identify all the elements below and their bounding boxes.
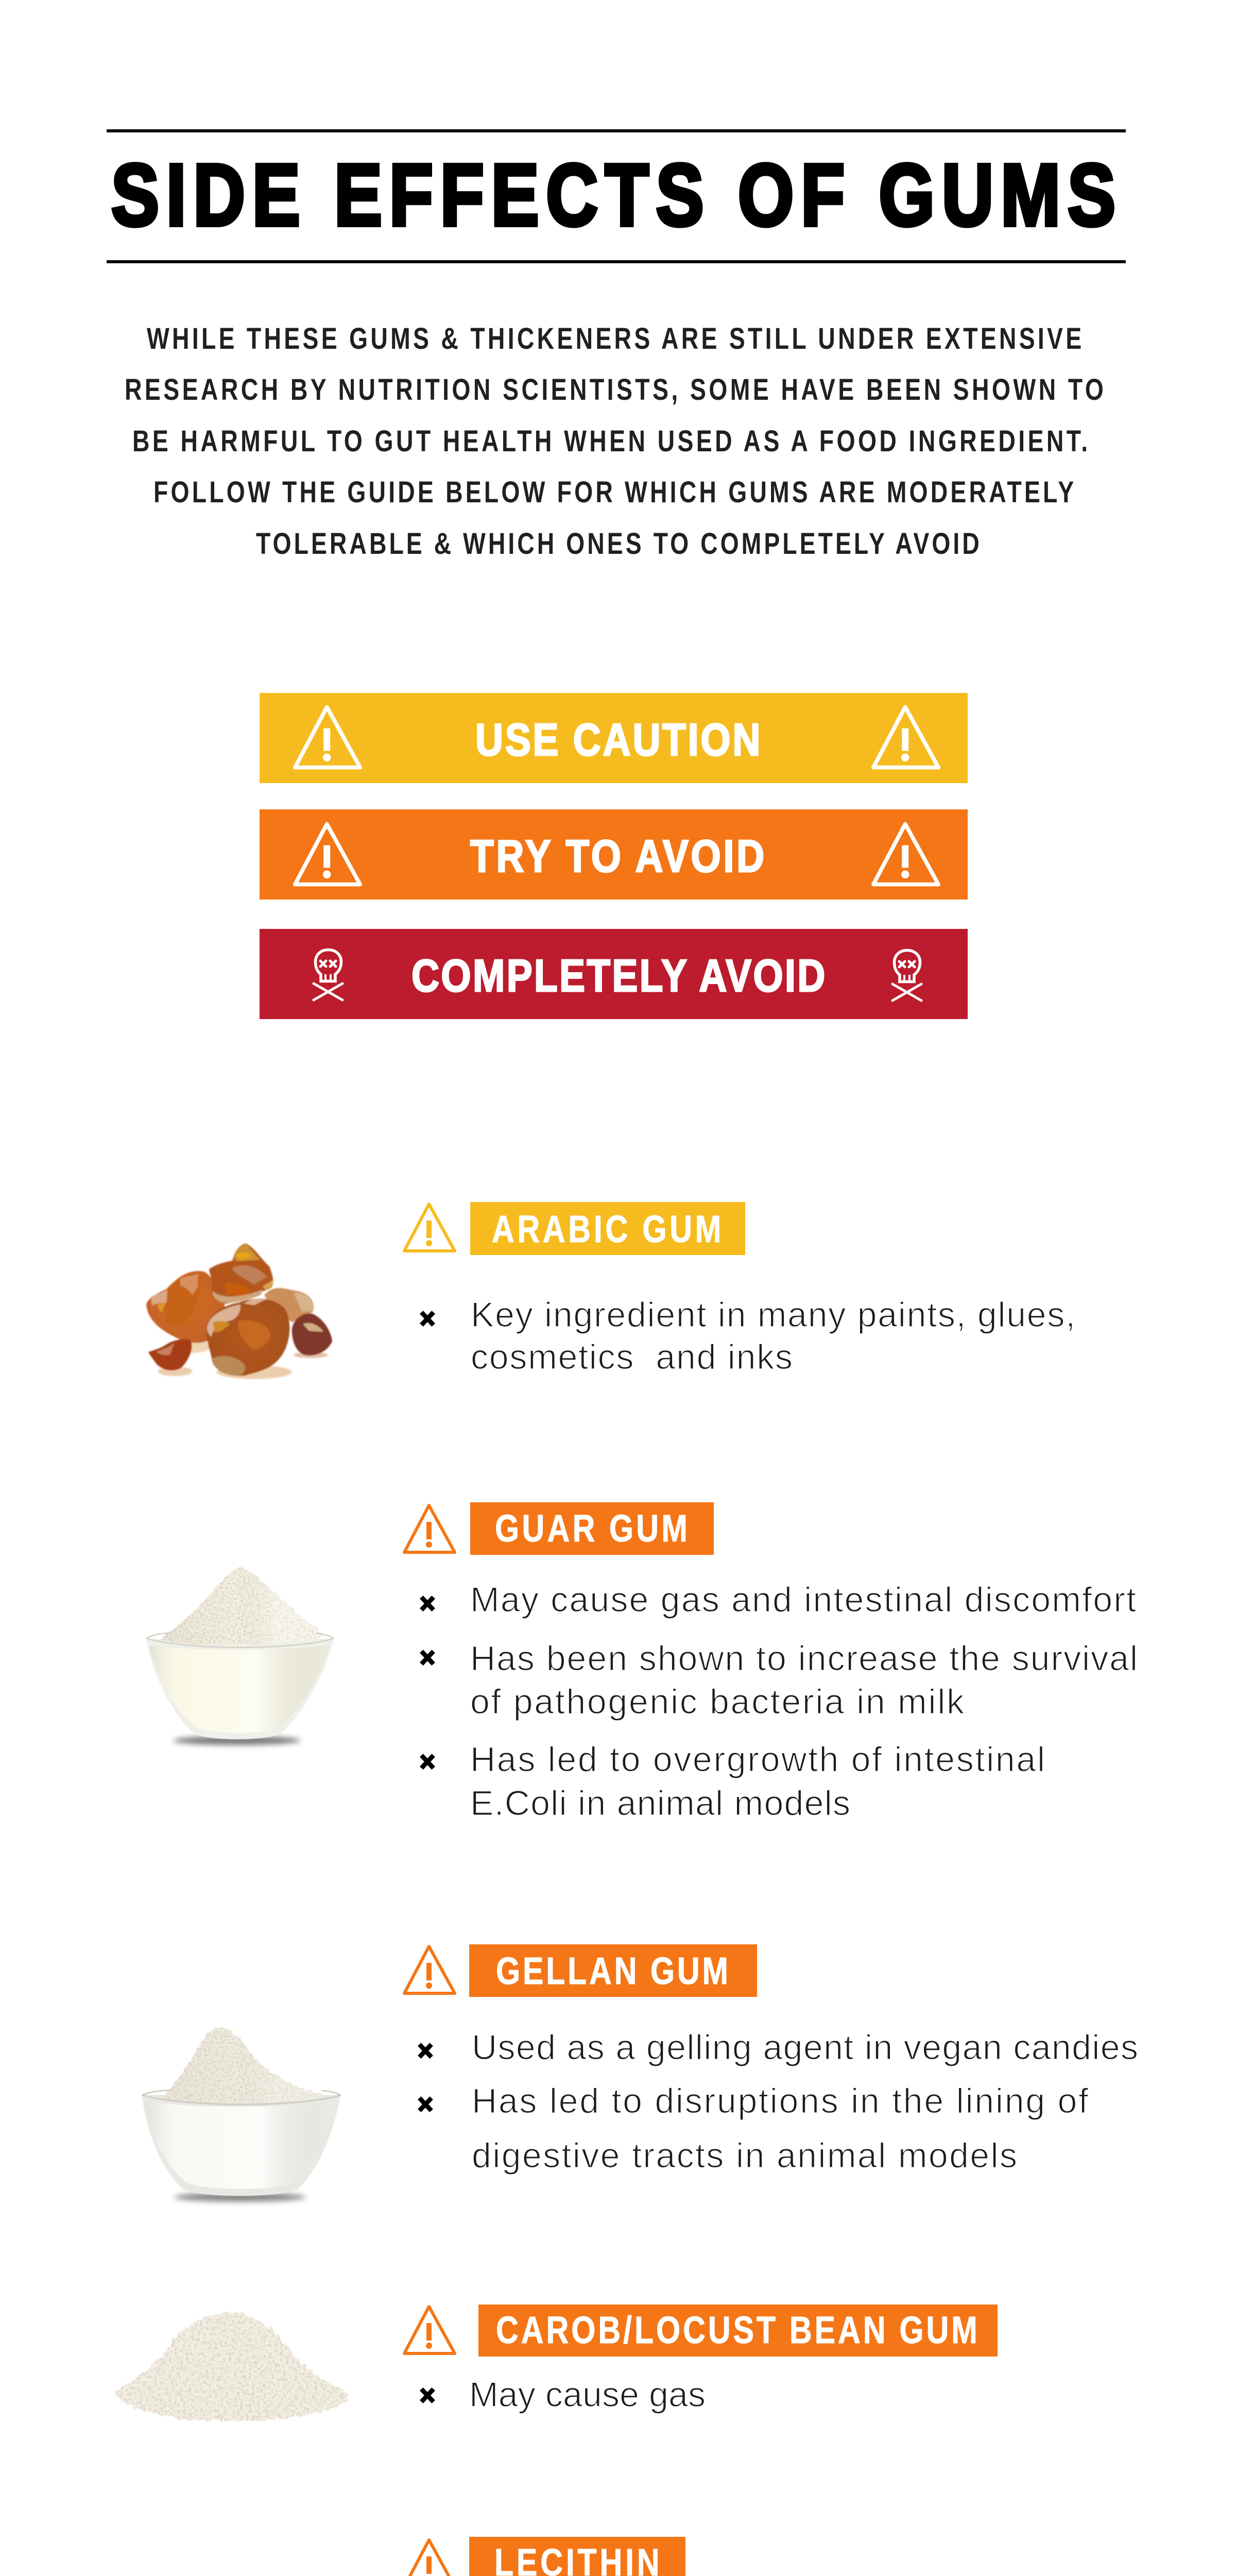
legend bar: try to avoid [260, 809, 968, 900]
label: guar gum: GUAR GUM [495, 1507, 688, 1550]
bullet: paints, glues: Key ingredient in many paints, glues, [471, 1295, 1075, 1334]
intro paragraph: RESEARCH BY NUTRITION SCIENTISTS, SOME HAVE BEEN SHOWN TO [125, 373, 1104, 406]
bullet: paints, glues: cosmetics and inks [471, 1337, 793, 1377]
bullet: E.Coli overgrowth: E.Coli in animal models [470, 1784, 850, 1823]
icon: warning triangle [404, 2307, 455, 2353]
bullet: digestive tract lining: digestive tracts in animal models [472, 2136, 1017, 2175]
panel: guar gum [146, 1502, 1138, 1823]
icon: warning triangle [404, 1505, 455, 1552]
bullet: pathogenic bacteria: Has been shown to increase the survival [470, 1639, 1138, 1678]
bullet: paints, glues [421, 1295, 1075, 1377]
photo: gellan gum bowl [142, 2027, 341, 2201]
legend bar: try to avoid: TRY TO AVOID [470, 831, 764, 882]
bullet: gas and discomfort: May cause gas and intestinal discomfort [470, 1580, 1136, 1619]
label: lecithin [469, 2537, 685, 2576]
bullet: E.Coli overgrowth: Has led to overgrowth of intestinal [470, 1740, 1045, 1779]
bullet: digestive tract lining [419, 2081, 1088, 2175]
panel: gellan gum [142, 1944, 1138, 2201]
intro paragraph: TOLERABLE & WHICH ONES TO COMPLETELY AVOID [256, 527, 980, 561]
label: arabic gum [470, 1202, 745, 1255]
bullet: E.Coli overgrowth [421, 1740, 1045, 1823]
photo: guar gum bowl [146, 1568, 334, 1745]
bullet: digestive tract lining: Has led to disruptions in the lining of [472, 2081, 1088, 2121]
photo: arabic gum resin [145, 1243, 333, 1380]
bullet: gelling agent: Used as a gelling agent in vegan candies [472, 2028, 1138, 2067]
intro paragraph: BE HARMFUL TO GUT HEALTH WHEN USED AS A FOOD INGREDIENT. [132, 425, 1088, 458]
legend bar: use caution: USE CAUTION [475, 715, 760, 765]
label: guar gum [470, 1502, 714, 1555]
bullet: may cause gas: May cause gas [469, 2375, 706, 2414]
legend bar: completely avoid [260, 929, 968, 1019]
intro paragraph: WHILE THESE GUMS & THICKENERS ARE STILL UNDER EXTENSIVE [147, 322, 1082, 355]
panel: arabic gum [146, 1202, 1075, 1379]
icon: warning triangle [404, 1946, 455, 1993]
label: arabic gum: ARABIC GUM [492, 1208, 721, 1250]
panel: lecithin [140, 2537, 1084, 2576]
label: carob/locust bean gum: CAROB/LOCUST BEAN GUM [496, 2309, 977, 2351]
bullet: pathogenic bacteria [421, 1639, 1138, 1721]
icon: warning triangle [404, 2540, 455, 2576]
photo: carob powder pile [116, 2312, 349, 2421]
intro paragraph: FOLLOW THE GUIDE BELOW FOR WHICH GUMS ARE MODERATELY [153, 476, 1074, 509]
title block [107, 129, 1126, 263]
label: gellan gum: GELLAN GUM [496, 1950, 728, 1992]
panel: carob/locust bean gum [116, 2304, 998, 2421]
intro paragraph [125, 322, 1104, 561]
legend bar: use caution [260, 693, 968, 783]
label: gellan gum [469, 1944, 757, 1997]
icon: caution triangle [404, 1204, 455, 1251]
legend bar: completely avoid: COMPLETELY AVOID [411, 951, 825, 1001]
title: SIDE EFFECTS OF GUMS [111, 146, 1115, 244]
legend [260, 693, 968, 1019]
bullet: pathogenic bacteria: of pathogenic bacteria in milk [470, 1682, 965, 1721]
